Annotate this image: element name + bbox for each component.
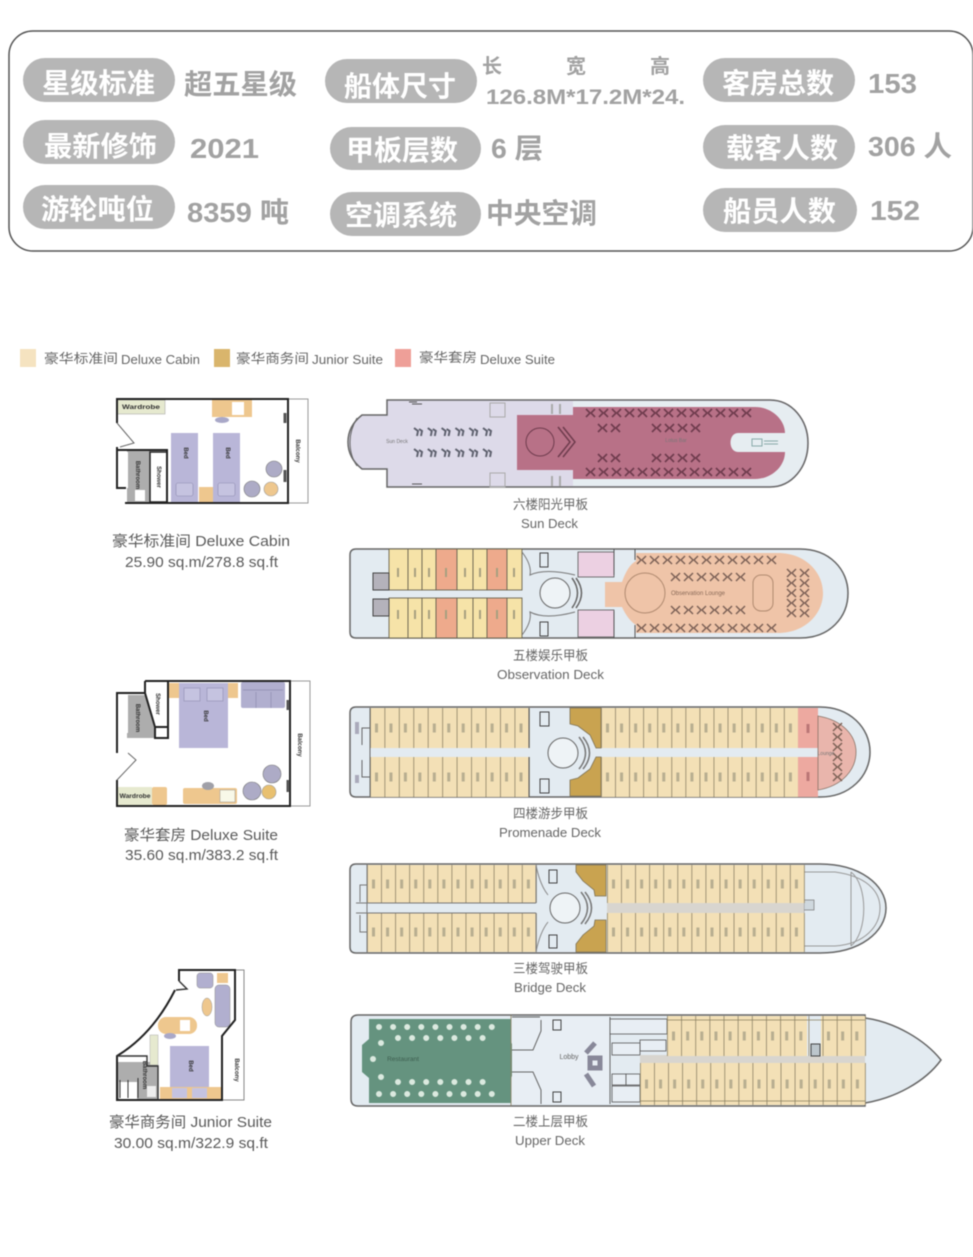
deck plan: observation deck bbox=[350, 549, 848, 638]
label: promenade deck: Promenade Deck bbox=[499, 825, 601, 840]
floor plan: deluxe suite: Bed bbox=[202, 710, 208, 722]
legend: 豪华套房 bbox=[419, 350, 477, 365]
spec: total cabins: 153 bbox=[868, 68, 917, 99]
label: sun deck: Sun Deck bbox=[521, 516, 578, 531]
floor plan: junior suite bbox=[117, 970, 244, 1100]
deck plan: sun deck bbox=[348, 400, 808, 487]
caption: deluxe cabin: 豪华标准间 Deluxe Cabin bbox=[112, 532, 290, 550]
deck plan: sun deck: Sun Deck bbox=[386, 439, 408, 445]
label: sun deck: 六楼阳光甲板 bbox=[513, 497, 588, 512]
spec: air conditioning: 空调系统 bbox=[345, 200, 457, 231]
deluxe suites bbox=[798, 708, 818, 748]
label: bridge deck bbox=[513, 961, 588, 995]
floor plan: deluxe cabin bbox=[117, 399, 308, 503]
label: observation deck: 五楼娱乐甲板 bbox=[513, 648, 588, 663]
lobby: Lobby bbox=[559, 1054, 579, 1061]
cabins left bbox=[367, 865, 536, 903]
spec: deck count: 甲板层数 bbox=[346, 135, 458, 166]
spec: hull size: 宽 bbox=[566, 54, 586, 78]
spec: star rating: 超五星级 bbox=[184, 69, 297, 100]
label: upper deck: 二楼上层甲板 bbox=[513, 1114, 588, 1129]
lotus bar bbox=[517, 407, 785, 479]
atrium bbox=[548, 738, 578, 768]
label: bridge deck: Bridge Deck bbox=[514, 980, 587, 995]
caption: junior suite: 30.00 sq.m/322.9 sq.ft bbox=[114, 1135, 269, 1152]
caption: junior suite: 豪华商务间 Junior Suite bbox=[109, 1113, 272, 1131]
spec: passengers: 载客人数 bbox=[726, 133, 838, 164]
floor plan: deluxe cabin: Bed bbox=[224, 447, 230, 459]
deck plan: upper deck bbox=[351, 1015, 941, 1106]
corridor bbox=[607, 903, 804, 913]
floor plan: deluxe suite: Shower bbox=[154, 693, 160, 716]
lounge bbox=[818, 716, 856, 790]
legend: Junior Suite bbox=[312, 352, 383, 367]
observation lounge bbox=[605, 553, 823, 633]
floor plan: deluxe suite: Bathroom bbox=[134, 704, 140, 732]
spec: hull size: 长 bbox=[482, 55, 502, 78]
floor plan: junior suite: Bathroom bbox=[141, 1061, 147, 1089]
floor plan: deluxe cabin: Bed bbox=[182, 447, 188, 459]
spec: star rating bbox=[23, 58, 297, 102]
deck plan: promenade deck bbox=[350, 707, 870, 797]
spec: latest refit: 2021 bbox=[190, 133, 259, 164]
junior suites bbox=[570, 708, 601, 748]
spec: crew: 船员人数 bbox=[723, 196, 836, 227]
spec: total cabins bbox=[703, 58, 917, 102]
spec: crew: 152 bbox=[870, 195, 920, 226]
spec: deck count: 6 层 bbox=[491, 133, 543, 164]
panel: ship specifications bbox=[9, 31, 973, 251]
cabins left bbox=[370, 708, 529, 748]
cabins bottom bbox=[640, 1063, 865, 1105]
spec: passengers bbox=[703, 125, 952, 169]
spec: tonnage: 游轮吨位 bbox=[41, 193, 154, 225]
label: observation deck: Observation Deck bbox=[497, 667, 605, 682]
floor plan: deluxe cabin: Wardrobe bbox=[122, 405, 161, 411]
spec: air conditioning bbox=[330, 192, 597, 236]
cabins top row bbox=[389, 549, 522, 590]
spec: passengers: 306 人 bbox=[868, 131, 952, 162]
floor plan: deluxe cabin: Balcony bbox=[294, 439, 300, 463]
label: sun deck bbox=[513, 497, 588, 531]
cabins bottom row bbox=[389, 598, 522, 638]
spec: hull size: 高 bbox=[650, 54, 670, 78]
label: observation deck bbox=[497, 648, 605, 682]
cabins right bbox=[601, 708, 798, 748]
restaurant: Restaurant bbox=[387, 1056, 419, 1063]
caption: junior suite bbox=[109, 1113, 272, 1152]
spec: hull size: 船体尺寸 bbox=[344, 71, 456, 102]
spec: tonnage bbox=[23, 185, 289, 229]
atrium bbox=[540, 578, 570, 608]
spec: total cabins: 客房总数 bbox=[722, 68, 834, 99]
spec: latest refit bbox=[23, 120, 259, 164]
spec: latest refit: 最新修饰 bbox=[44, 131, 157, 162]
legend bbox=[20, 349, 555, 367]
caption: deluxe suite bbox=[124, 826, 279, 864]
floor plan: deluxe suite bbox=[117, 681, 310, 806]
legend: 豪华标准间 bbox=[44, 351, 118, 366]
atrium bbox=[550, 893, 580, 923]
floor plan: junior suite: Bed bbox=[187, 1060, 193, 1072]
label: promenade deck: 四楼游步甲板 bbox=[513, 806, 588, 821]
spec: crew bbox=[703, 188, 920, 232]
caption: deluxe cabin: 25.90 sq.m/278.8 sq.ft bbox=[125, 554, 279, 571]
caption: deluxe suite: 豪华套房 Deluxe Suite bbox=[124, 826, 278, 844]
legend: 豪华商务间 bbox=[236, 351, 309, 366]
spec: air conditioning: 中央空调 bbox=[486, 198, 597, 229]
caption: deluxe cabin bbox=[112, 532, 290, 571]
label: upper deck: Upper Deck bbox=[515, 1133, 586, 1148]
pink rooms bbox=[578, 552, 614, 577]
label: promenade deck bbox=[499, 806, 601, 840]
spec: star rating: 星级标准 bbox=[42, 68, 155, 99]
spec: hull size: 126.8M*17.2M*24. bbox=[486, 86, 685, 109]
floor plan: deluxe suite: Balcony bbox=[296, 733, 302, 757]
junior suites bbox=[576, 865, 606, 896]
label: upper deck bbox=[513, 1114, 588, 1148]
deck plan: bridge deck bbox=[350, 864, 886, 953]
cabins right bbox=[607, 865, 804, 903]
restaurant bbox=[362, 1019, 520, 1103]
spec: deck count bbox=[330, 127, 543, 170]
caption: deluxe suite: 35.60 sq.m/383.2 sq.ft bbox=[125, 847, 279, 864]
floor plan: junior suite: Balcony bbox=[233, 1058, 239, 1082]
deck plan: observation deck: Observation Lounge bbox=[671, 591, 726, 597]
spec: hull size bbox=[325, 54, 685, 109]
service rooms bbox=[610, 1019, 667, 1102]
label: bridge deck: 三楼驾驶甲板 bbox=[513, 961, 588, 976]
deck plan: promenade deck: Lounge bbox=[818, 751, 835, 757]
spec: tonnage: 8359 吨 bbox=[187, 197, 289, 228]
sun loungers bbox=[412, 427, 495, 438]
floor plan: deluxe cabin: Shower bbox=[155, 466, 161, 488]
floor plan: deluxe cabin: Bathroom bbox=[134, 461, 140, 489]
legend: Deluxe Suite bbox=[480, 352, 555, 367]
legend: Deluxe Cabin bbox=[121, 352, 200, 367]
deck plan: sun deck: Lotus Bar bbox=[665, 438, 687, 444]
cabins top bbox=[667, 1016, 865, 1056]
floor plan: deluxe suite: Wardrobe bbox=[120, 794, 151, 800]
lobby bbox=[512, 1017, 610, 1104]
